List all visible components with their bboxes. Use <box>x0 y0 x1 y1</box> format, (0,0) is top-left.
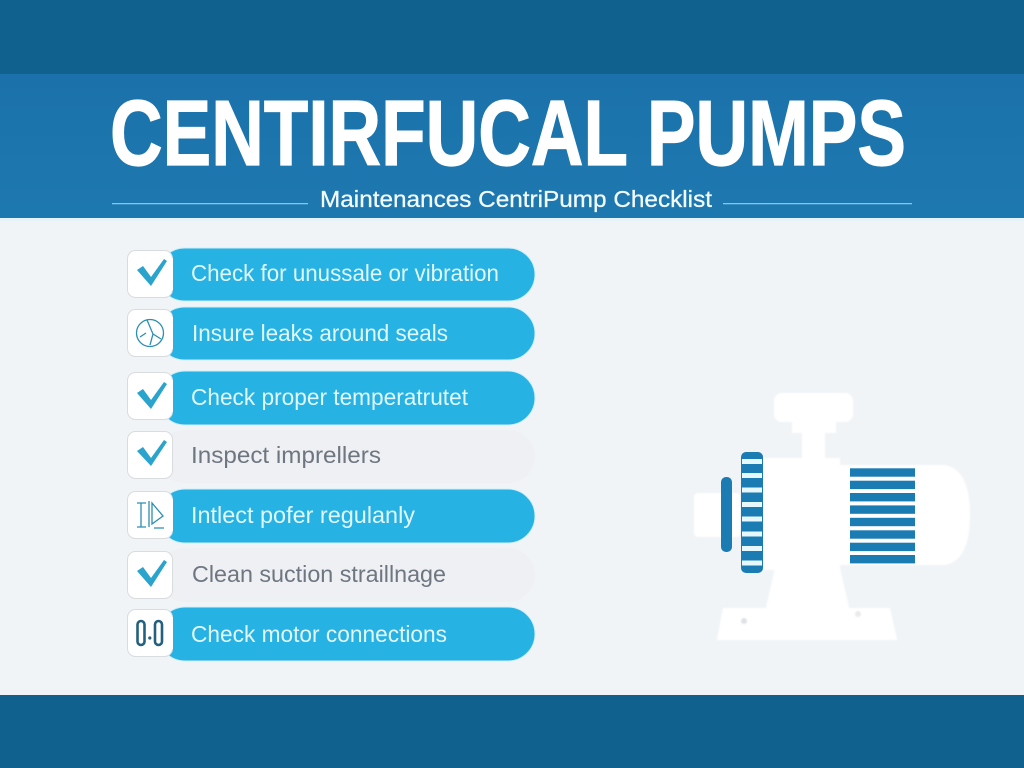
header panel <box>0 74 1024 221</box>
item 3: Check proper temperatrutet <box>191 384 469 410</box>
checklist panel <box>128 248 535 661</box>
pump body silhouette <box>694 393 970 640</box>
item 6: Clean suction straillnage <box>192 561 446 587</box>
item 6 <box>128 548 535 602</box>
item 3 <box>128 371 535 425</box>
subtitle with rules: Maintenances CentriPump Checklist <box>320 186 712 212</box>
top band <box>0 0 1024 74</box>
item 4: Inspect imprellers <box>191 442 381 468</box>
impeller fins <box>741 452 763 573</box>
item 5: Intlect pofer regulanly <box>191 502 416 528</box>
item 7 <box>128 607 535 661</box>
item 1: Check for unussale or vibration <box>191 260 499 286</box>
item 5 <box>128 489 535 543</box>
item 7: Check motor connections <box>191 621 447 647</box>
mounting holes <box>741 611 861 624</box>
item 2 <box>128 307 535 360</box>
item 2: Insure leaks around seals <box>192 320 448 346</box>
footer band <box>0 695 1024 768</box>
pump illustration <box>694 393 970 640</box>
motor cooling stripes <box>850 468 915 563</box>
item 1 <box>128 248 535 301</box>
inlet flange bar <box>721 477 732 552</box>
item 4 <box>128 430 535 483</box>
